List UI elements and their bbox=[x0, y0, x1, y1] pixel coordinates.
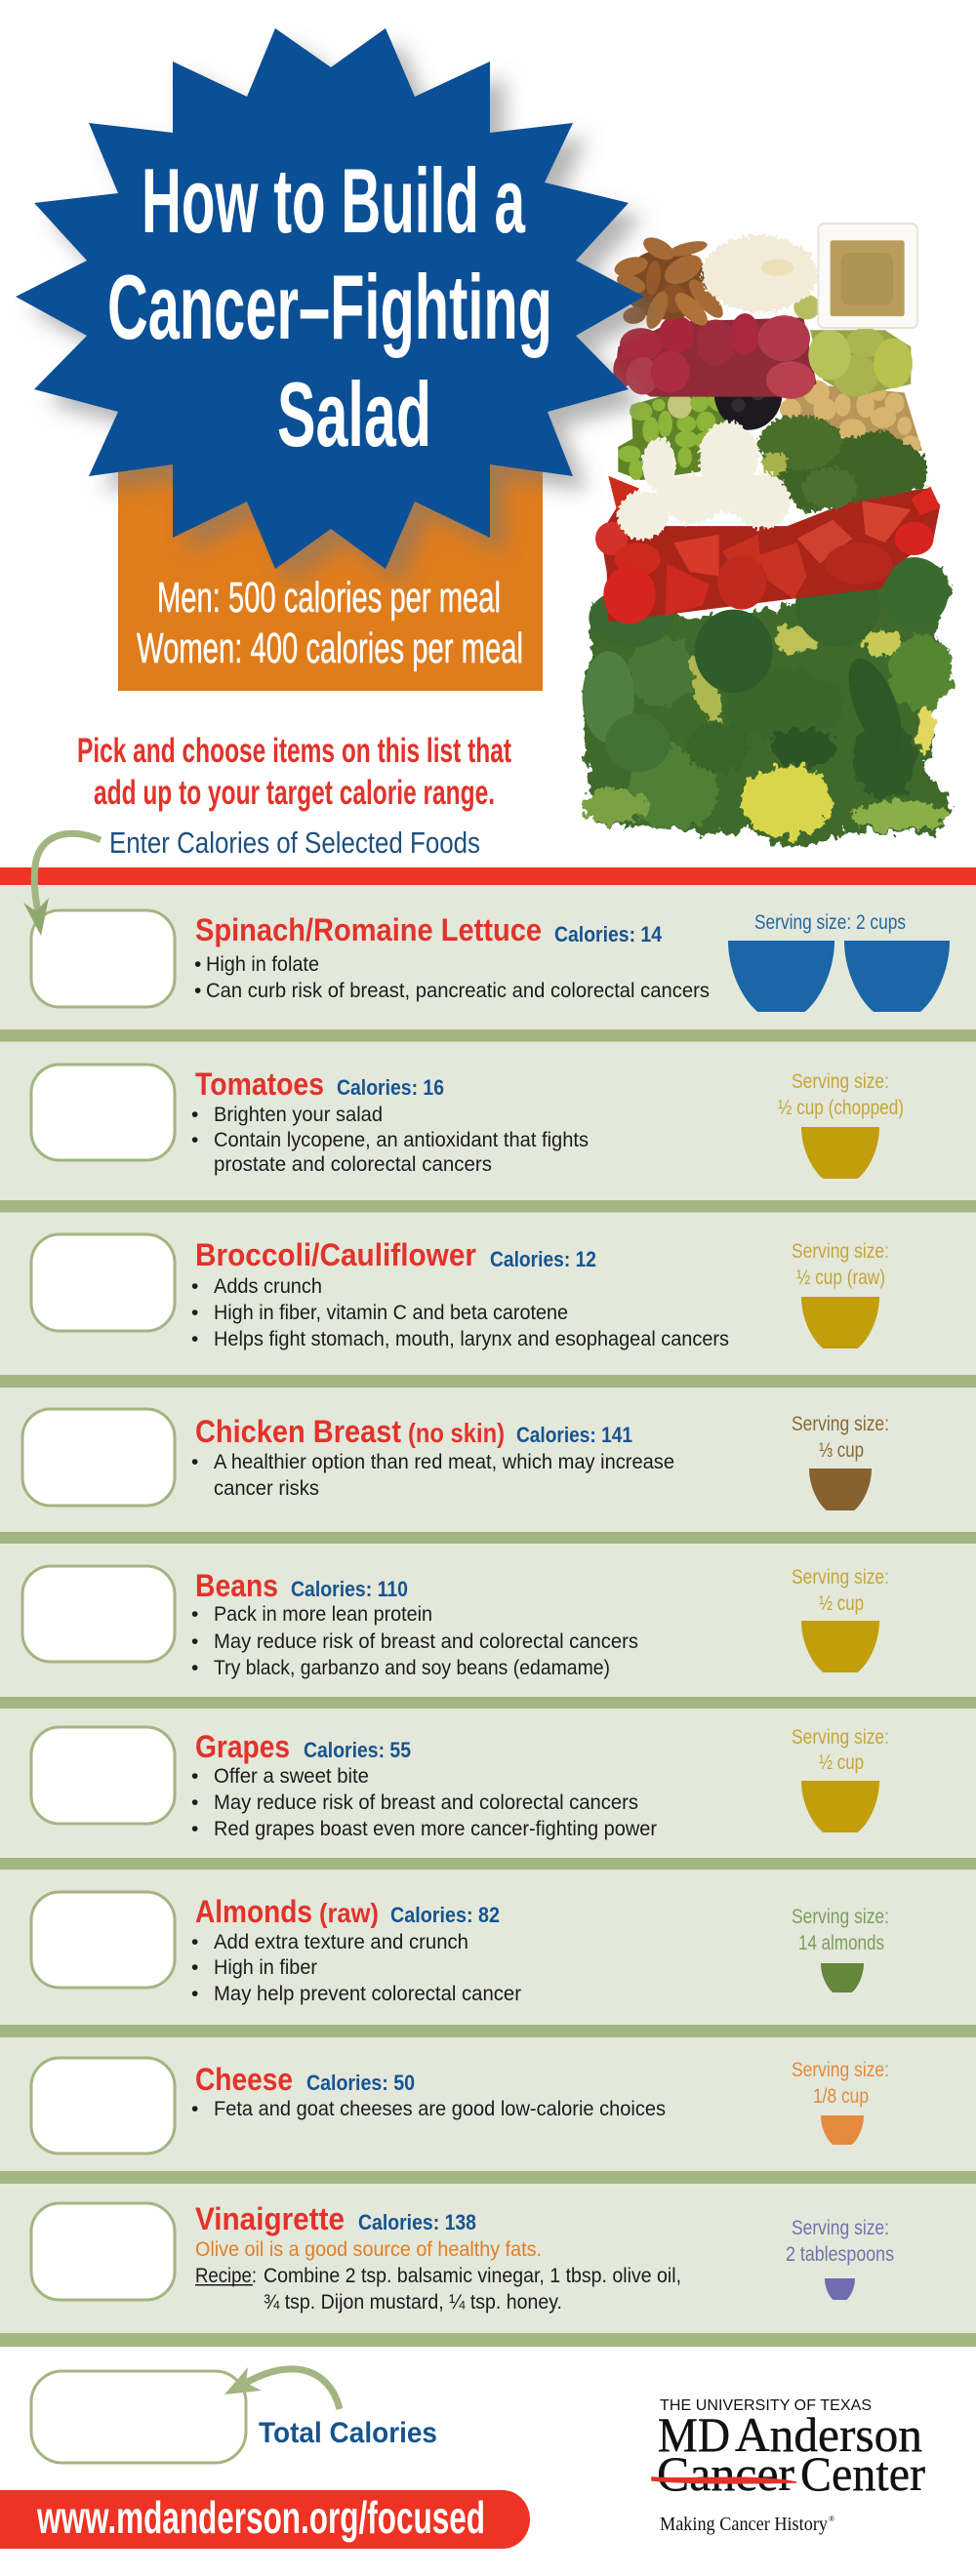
healthy fats note: Olive oil is a good source of healthy fats. bbox=[195, 2238, 542, 2261]
serving size: Serving size: bbox=[792, 1240, 889, 1263]
benefits: • bbox=[191, 1630, 198, 1653]
almonds bbox=[613, 233, 727, 334]
food name: Grapes bbox=[195, 1729, 290, 1764]
list background bbox=[0, 885, 976, 2339]
serving size: Serving size: bbox=[792, 1070, 889, 1093]
qualifier: (no skin) bbox=[408, 1418, 505, 1448]
benefits: • bbox=[191, 1818, 198, 1840]
title starburst bbox=[16, 28, 659, 584]
logo: MD Anderson: Making Cancer History bbox=[660, 2514, 828, 2535]
serving size: 14 almonds bbox=[798, 1932, 884, 1954]
calories: Calories: 82 bbox=[390, 1903, 500, 1927]
benefits: • bbox=[191, 1129, 198, 1151]
serving size: Serving size: bbox=[792, 1726, 889, 1749]
benefits: • bbox=[191, 1956, 198, 1979]
serving size: 2 tablespoons bbox=[786, 2243, 894, 2266]
serving size bbox=[792, 2059, 889, 2108]
row: grapes bbox=[31, 1726, 889, 1840]
calories: Calories: 16 bbox=[337, 1075, 444, 1100]
enter calories label: Enter Calories of Selected Foods bbox=[109, 825, 480, 860]
benefits: • bbox=[191, 1791, 198, 1814]
benefits: • bbox=[191, 1931, 198, 1953]
input box bbox=[31, 1065, 175, 1160]
input box bbox=[31, 910, 175, 1007]
calories: Calories: 55 bbox=[304, 1738, 411, 1762]
bowl bbox=[801, 1127, 879, 1179]
row: tomatoes bbox=[31, 1065, 904, 1179]
calories: Calories: 138 bbox=[358, 2210, 476, 2234]
tomato layer bbox=[595, 476, 940, 624]
women's calorie target: Women: 400 calories per meal bbox=[137, 624, 523, 672]
input box bbox=[22, 1409, 175, 1506]
food name: Almonds bbox=[195, 1894, 312, 1929]
benefits: • bbox=[191, 1983, 198, 2005]
benefits: prostate and colorectal cancers bbox=[214, 1153, 492, 1176]
bowl bbox=[801, 1297, 879, 1348]
recipe: ¾ tsp. Dijon mustard, ¼ tsp. honey. bbox=[264, 2291, 562, 2314]
salad photo illustration bbox=[583, 223, 955, 847]
red grapes bbox=[613, 313, 817, 399]
calories: Calories: 14 bbox=[554, 922, 663, 946]
title text: Cancer–Fighting bbox=[107, 256, 552, 358]
benefits: • bbox=[191, 1275, 198, 1298]
calories: Calories: 141 bbox=[516, 1423, 632, 1447]
logo: MD Anderson: THE UNIVERSITY OF TEXAS bbox=[660, 2397, 872, 2414]
website url: www.mdanderson.org/focused bbox=[36, 2492, 485, 2543]
red top bar bbox=[0, 867, 976, 885]
chickpeas bbox=[780, 381, 922, 454]
benefits bbox=[191, 1931, 521, 2005]
title text bbox=[107, 149, 552, 465]
benefits bbox=[191, 1275, 729, 1350]
bowl bbox=[801, 1781, 879, 1832]
benefits: Contain lycopene, an antioxidant that fights bbox=[214, 1129, 589, 1151]
serving size: ½ cup (chopped) bbox=[778, 1097, 904, 1119]
serving size bbox=[786, 2217, 894, 2266]
benefits: High in fiber bbox=[214, 1956, 317, 1979]
benefits: Offer a sweet bite bbox=[214, 1765, 369, 1788]
row: spinach bbox=[31, 910, 950, 1012]
input box bbox=[31, 1892, 175, 1988]
benefits: • bbox=[191, 1603, 198, 1626]
serving size bbox=[792, 1566, 889, 1615]
food name: Vinaigrette bbox=[195, 2201, 345, 2236]
benefits bbox=[191, 1104, 589, 1176]
serving size bbox=[792, 1726, 889, 1774]
benefits: • bbox=[191, 1328, 198, 1350]
benefits: Brighten your salad bbox=[214, 1104, 383, 1126]
food name: Spinach/Romaine Lettuce bbox=[195, 912, 542, 947]
black beans bbox=[714, 355, 783, 430]
serving size: ½ cup bbox=[819, 1751, 864, 1774]
title text: How to Build a bbox=[142, 149, 525, 252]
input box bbox=[31, 2058, 175, 2153]
serving size bbox=[792, 1906, 889, 1954]
bowl bbox=[801, 1621, 879, 1672]
logo: MD Anderson: ® bbox=[829, 2515, 834, 2523]
input box bbox=[31, 2203, 175, 2300]
bowl bbox=[821, 1963, 864, 1992]
benefits bbox=[191, 1451, 674, 1500]
food name: Tomatoes bbox=[195, 1067, 324, 1102]
instructions: Pick and choose items on this list that bbox=[77, 732, 511, 770]
benefits bbox=[191, 1603, 638, 1679]
feta cheese bbox=[702, 235, 818, 312]
total calories box bbox=[31, 2371, 246, 2463]
calories: Calories: 110 bbox=[291, 1577, 408, 1601]
logo: MD Anderson: MD bbox=[658, 2407, 730, 2462]
benefits: Feta and goat cheeses are good low-calorie choices bbox=[214, 2098, 666, 2120]
row: beans bbox=[22, 1566, 889, 1679]
input box bbox=[22, 1566, 175, 1662]
benefits: Red grapes boast even more cancer-fighting power bbox=[214, 1818, 657, 1840]
serving size bbox=[778, 1070, 904, 1119]
serving size: ½ cup (raw) bbox=[796, 1267, 885, 1289]
benefits: • bbox=[191, 1104, 198, 1126]
benefits: • bbox=[191, 1302, 198, 1324]
benefits: May reduce risk of breast and colorectal cancers bbox=[214, 1791, 638, 1814]
row: vinaigrette bbox=[31, 2201, 894, 2314]
row: cheese bbox=[31, 2058, 889, 2153]
benefits bbox=[191, 1765, 657, 1840]
logo: MD Anderson bbox=[652, 2397, 925, 2535]
recipe: Combine 2 tsp. balsamic vinegar, 1 tbsp. olive oil, bbox=[264, 2265, 681, 2287]
instructions: add up to your target calorie range. bbox=[94, 774, 495, 812]
bowl bbox=[821, 2115, 864, 2145]
row: chicken bbox=[22, 1409, 889, 1510]
benefits: A healthier option than red meat, which may increase bbox=[214, 1451, 674, 1473]
serving size: Serving size: bbox=[792, 2217, 889, 2239]
benefits bbox=[194, 953, 710, 1002]
serving size: Serving size: bbox=[792, 1906, 889, 1928]
benefits: • bbox=[194, 980, 201, 1002]
logo: MD Anderson: Cancer bbox=[657, 2446, 794, 2501]
benefits: May help prevent colorectal cancer bbox=[214, 1983, 521, 2005]
arrow: to total box bbox=[224, 2367, 340, 2409]
cauliflower bbox=[617, 422, 791, 540]
benefits: High in folate bbox=[206, 953, 319, 976]
row: broccoli bbox=[31, 1234, 889, 1350]
calorie target panel bbox=[118, 464, 543, 691]
website pill bbox=[0, 2490, 530, 2549]
serving size: Serving size: bbox=[792, 1566, 889, 1589]
title text: Salad bbox=[277, 363, 431, 465]
serving size: ⅓ cup bbox=[819, 1439, 864, 1462]
recipe bbox=[195, 2265, 681, 2314]
serving size bbox=[792, 1413, 889, 1462]
benefits: Pack in more lean protein bbox=[214, 1603, 432, 1626]
benefits: • bbox=[191, 1657, 198, 1679]
instructions bbox=[77, 732, 511, 812]
benefits: Helps fight stomach, mouth, larynx and esophageal cancers bbox=[214, 1328, 729, 1350]
benefits: • bbox=[191, 2098, 198, 2120]
logo: MD Anderson: Center bbox=[800, 2446, 925, 2501]
input box bbox=[31, 1234, 175, 1331]
vinaigrette dish bbox=[818, 223, 917, 328]
logo: MD Anderson: Anderson bbox=[735, 2407, 922, 2462]
food name: Chicken Breast bbox=[195, 1414, 401, 1449]
food name: Broccoli/Cauliflower bbox=[195, 1237, 476, 1272]
serving size: Serving size: bbox=[792, 2059, 889, 2081]
serving size: Serving size: 2 cups bbox=[754, 911, 906, 934]
bowls bbox=[728, 941, 950, 1012]
food name: Cheese bbox=[195, 2062, 293, 2097]
benefits: • bbox=[191, 1765, 198, 1788]
green grapes bbox=[793, 295, 913, 397]
edamame bbox=[618, 372, 732, 480]
total calories label: Total Calories bbox=[259, 2417, 437, 2449]
input box bbox=[31, 1727, 175, 1824]
serving size: ½ cup bbox=[819, 1592, 864, 1615]
broccoli bbox=[758, 416, 927, 513]
qualifier: (raw) bbox=[319, 1898, 379, 1928]
arrow: to first input box bbox=[23, 833, 101, 936]
calories: Calories: 50 bbox=[306, 2071, 415, 2095]
row: almonds bbox=[31, 1892, 889, 2005]
benefits: Try black, garbanzo and soy beans (edamame) bbox=[214, 1657, 610, 1679]
bowl bbox=[809, 1469, 872, 1510]
lettuce and spinach layer bbox=[583, 557, 955, 847]
benefits: Add extra texture and crunch bbox=[214, 1931, 468, 1953]
recipe: Recipe: bbox=[195, 2265, 257, 2287]
men's calorie target: Men: 500 calories per meal bbox=[157, 574, 501, 622]
benefits: Can curb risk of breast, pancreatic and colorectal cancers bbox=[206, 980, 710, 1002]
benefits: High in fiber, vitamin C and beta carotene bbox=[214, 1302, 568, 1324]
serving size: 1/8 cup bbox=[813, 2085, 869, 2108]
bowl bbox=[825, 2278, 855, 2300]
benefits: May reduce risk of breast and colorectal cancers bbox=[214, 1630, 638, 1653]
serving size: Serving size: bbox=[792, 1413, 889, 1435]
food name: Beans bbox=[195, 1568, 278, 1603]
calories: Calories: 12 bbox=[490, 1247, 596, 1271]
benefits: cancer risks bbox=[214, 1477, 319, 1500]
benefits: • bbox=[194, 953, 201, 976]
serving size bbox=[792, 1240, 889, 1289]
benefits: Adds crunch bbox=[214, 1275, 322, 1298]
benefits: • bbox=[191, 1451, 198, 1473]
